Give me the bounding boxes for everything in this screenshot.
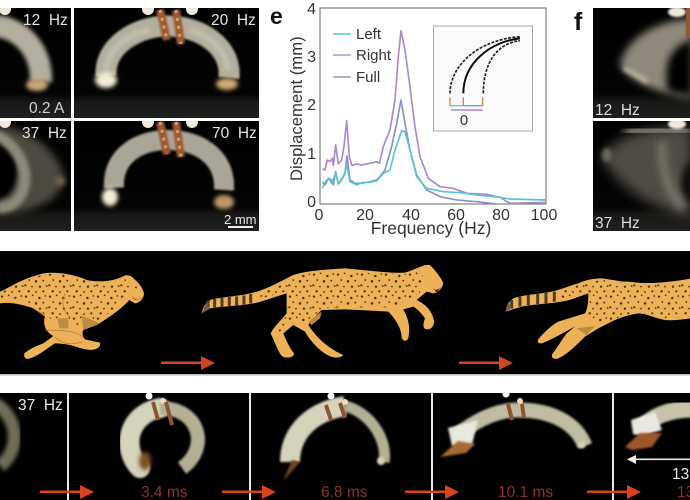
y axis tick labels (307, 1, 316, 211)
cheetah 2 (202, 265, 443, 358)
x axis tick labels: 100 (531, 207, 557, 224)
cheetah 3 (506, 278, 690, 359)
photo: 12 Hz (0, 3, 71, 118)
x axis tick labels: 40 (402, 207, 420, 224)
frame: 37 Hz (0, 397, 63, 466)
x axis tick labels: 60 (447, 207, 465, 224)
photo: 70 Hz (74, 116, 259, 231)
photo strip background (0, 393, 690, 500)
curves (322, 31, 546, 205)
frame: 3.4 ms (129, 392, 198, 470)
photo: 12 Hz: 0.2 A (29, 100, 65, 117)
legend: Right (356, 47, 392, 64)
legend: Left (356, 26, 382, 43)
panel label e: e (270, 3, 283, 29)
photo: f 12 Hz (593, 7, 690, 119)
y axis tick labels: 4 (307, 1, 316, 18)
cheetah 1 (0, 273, 144, 359)
x axis tick labels (315, 207, 557, 224)
y axis tick labels: 2 (307, 97, 316, 114)
photo: 70 Hz: 2 mm (224, 212, 256, 227)
arrow (459, 356, 513, 370)
frame: 13.5 ms (625, 409, 690, 483)
span arrow (627, 455, 690, 464)
x axis tick labels: 80 (492, 207, 510, 224)
legend (333, 26, 392, 86)
inset: deflection schematic (434, 26, 532, 131)
x axis title: Frequency (Hz) (371, 218, 491, 238)
photo: 37 Hz: 37 Hz (22, 125, 67, 142)
legend: Full (356, 69, 380, 86)
photo: 12 Hz: 12 Hz (23, 12, 68, 29)
photo: f 37 Hz: 37 Hz (595, 215, 640, 232)
frame: 6.8 ms (283, 392, 385, 481)
photo: 70 Hz: 70 Hz (212, 125, 257, 142)
frame: 37 Hz: 37 Hz (18, 397, 63, 414)
x axis tick labels: 0 (315, 207, 324, 224)
arrow (161, 356, 215, 370)
y axis tick labels: 0 (307, 194, 316, 211)
panel label f: f (574, 8, 583, 36)
photo: f 12 Hz: 12 Hz (595, 102, 640, 119)
y axis tick labels: 3 (307, 49, 316, 66)
frame: 10.1 ms (440, 390, 586, 457)
frame dividers (67, 393, 614, 500)
panel: cheetah gait sequence (0, 251, 690, 376)
photo: f 37 Hz (593, 119, 690, 232)
photo: 20 Hz (74, 3, 259, 118)
arrows between frames (40, 485, 641, 499)
x axis tick labels: 20 (356, 207, 374, 224)
inset: deflection schematic: 0 (460, 112, 468, 129)
photo: 37 Hz (0, 116, 71, 231)
photo: 20 Hz: 20 Hz (211, 12, 256, 29)
y axis tick labels: 1 (307, 146, 316, 163)
y axis title: Displacement (mm) (287, 36, 306, 181)
time labels (141, 484, 690, 500)
chart: displacement vs frequency (287, 1, 557, 238)
